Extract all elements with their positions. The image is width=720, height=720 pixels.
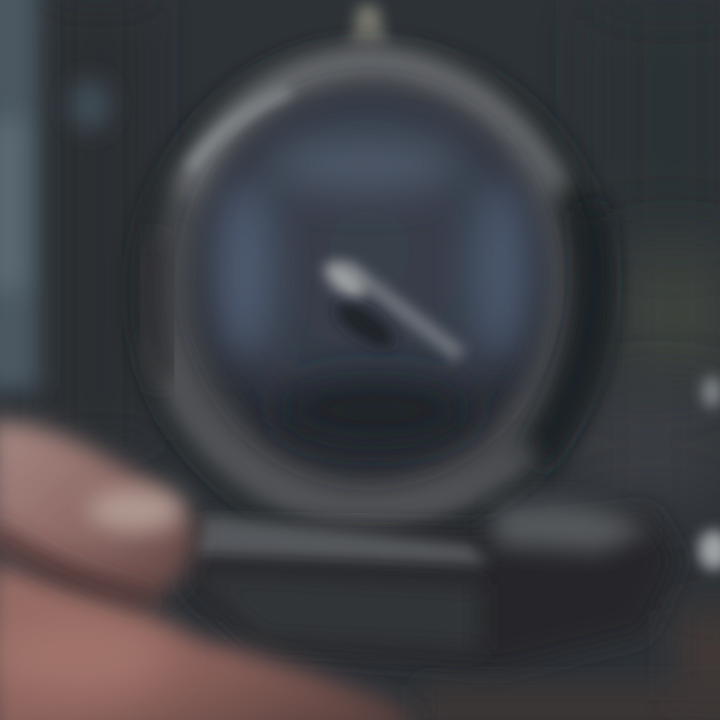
outer ring [134,46,610,538]
hanging loop [350,5,388,52]
hand [0,420,410,720]
dial tick blur [217,137,528,444]
barometer [134,5,610,538]
table and right highlights [420,376,720,720]
needle [319,255,465,360]
dial face [192,88,548,476]
base stand [185,503,680,670]
window light on left [0,0,110,390]
